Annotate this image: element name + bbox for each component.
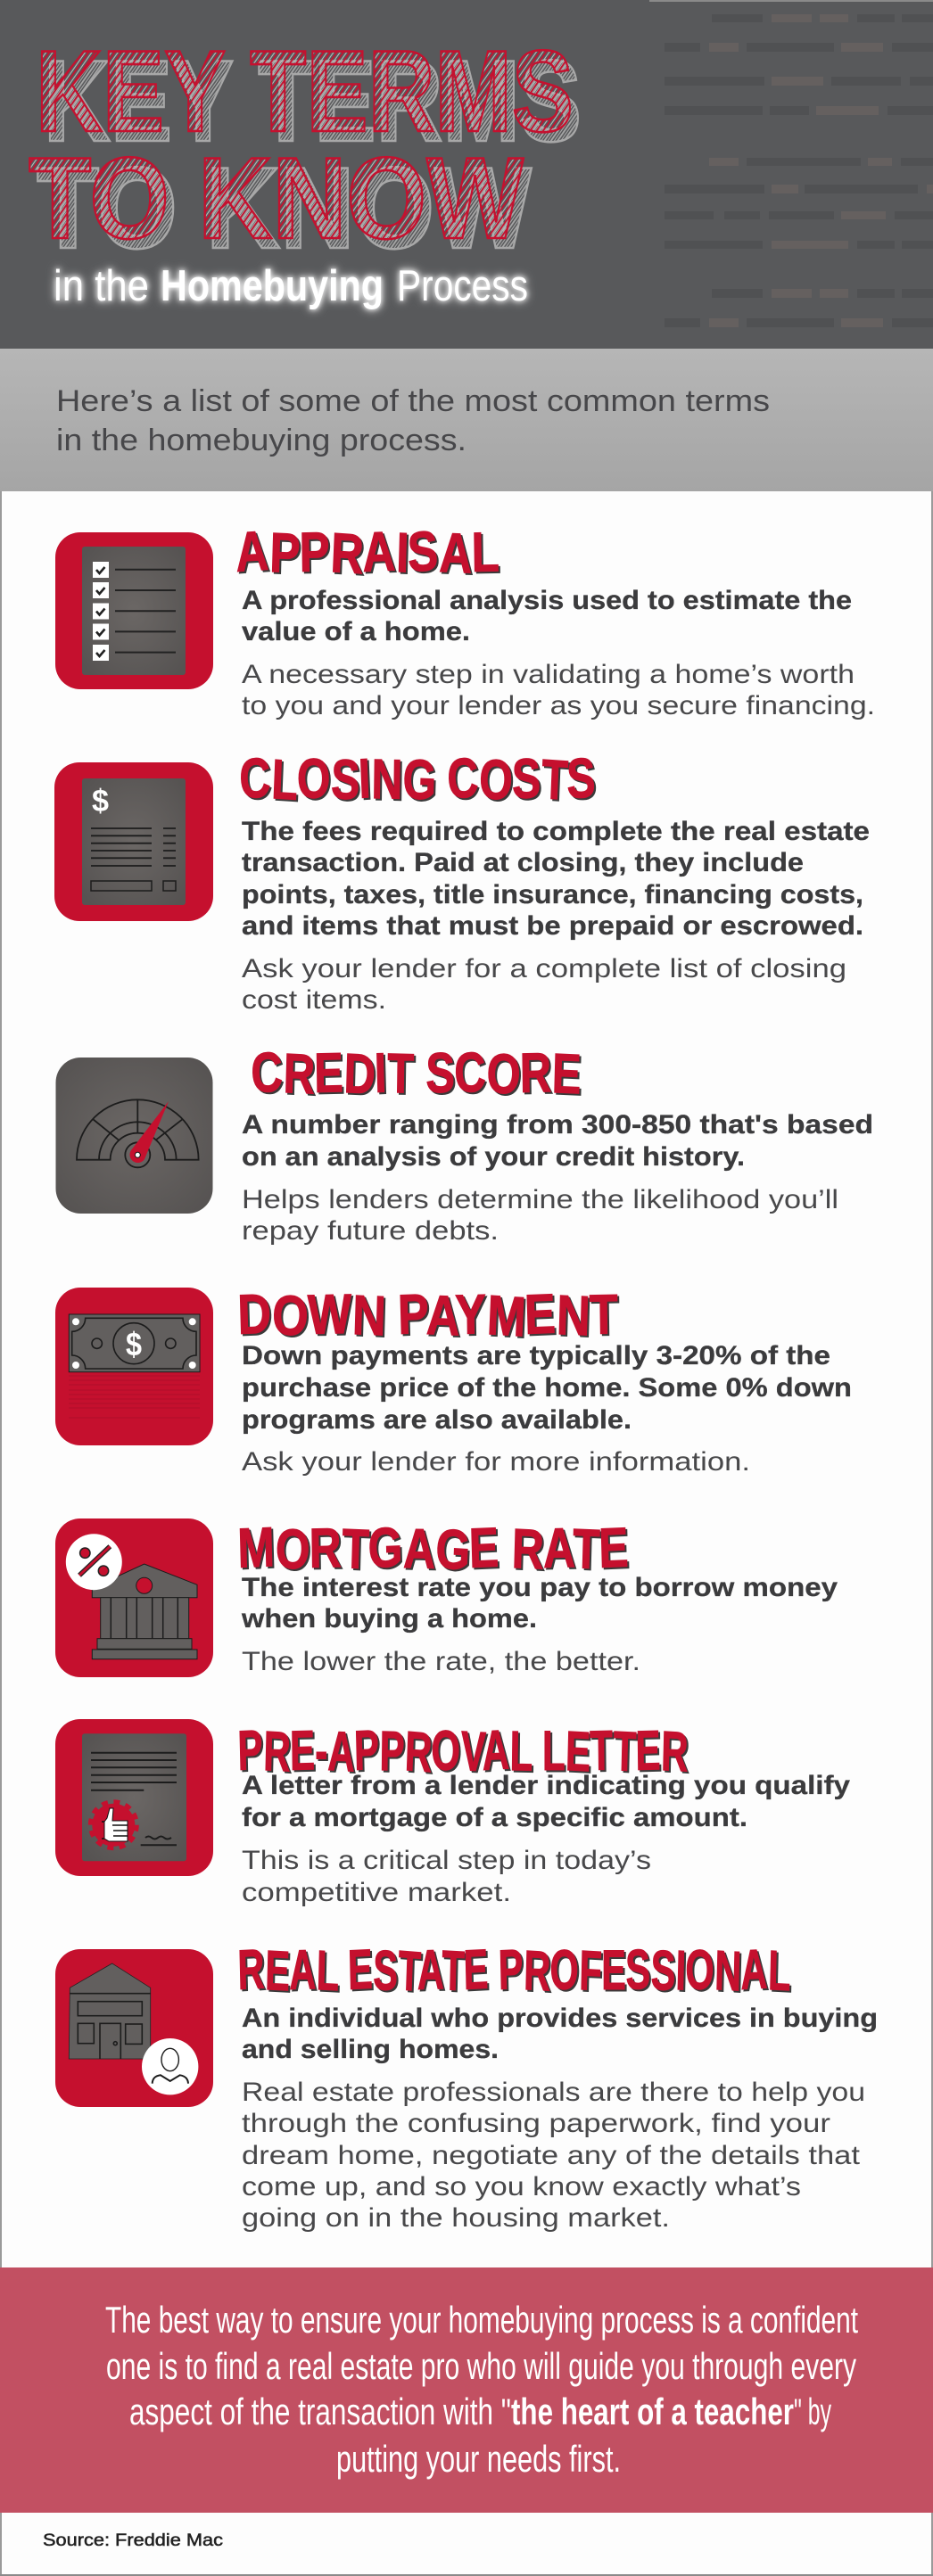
- heading: closing costs: CLOSING COSTS: [238, 747, 596, 812]
- panel: intro band: in the homebuying process.: [56, 424, 466, 457]
- panel: intro band: [0, 349, 933, 491]
- subtitle: Process: [397, 262, 528, 310]
- note: closing costs: cost items.: [242, 985, 386, 1015]
- panel: closing message: aspect of the transaction with ": [129, 2391, 511, 2432]
- note: closing costs: [242, 954, 846, 1015]
- title: [29, 26, 574, 263]
- note: pre-approval letter: [242, 1846, 651, 1907]
- heading: pre-approval letter: PRE-APPROVAL LETTER: [236, 1719, 689, 1784]
- definition: appraisal: value of a home.: [242, 617, 470, 646]
- definition: mortgage rate: when buying a home.: [241, 1604, 537, 1634]
- panel: mortgage rate: [55, 1517, 838, 1677]
- icon: stack of cash: [55, 1288, 213, 1445]
- icon: letter with seal: [55, 1719, 213, 1876]
- title: KEY TERMS: [36, 26, 574, 156]
- definition: credit score: A number ranging from 300-850 that's based: [242, 1110, 873, 1140]
- note: appraisal: [242, 660, 875, 720]
- note: credit score: repay future debts.: [242, 1216, 499, 1246]
- panel: closing message: the heart of a teacher: [511, 2391, 794, 2432]
- definition: real estate professional: An individual who provides services in buying: [242, 2004, 878, 2033]
- heading: down payment: DOWN PAYMENT: [236, 1283, 618, 1348]
- subtitle: Homebuying: [161, 262, 384, 310]
- icon: checklist: [55, 532, 213, 689]
- panel: closing message: putting your needs first.: [336, 2438, 621, 2480]
- note: credit score: Helps lenders determine the likelihood you’ll: [242, 1185, 838, 1214]
- title: TO KNOW: [29, 133, 524, 263]
- definition: closing costs: transaction. Paid at closing, they include: [242, 848, 804, 877]
- heading: real estate professional: REAL ESTATE PROFESSIONAL: [236, 1938, 792, 2003]
- subtitle: [54, 262, 528, 310]
- panel: down payment: [55, 1283, 852, 1477]
- subtitle: in the: [54, 262, 149, 310]
- definition: down payment: [242, 1341, 852, 1435]
- definition: down payment: purchase price of the home. Some 0% down: [242, 1373, 852, 1403]
- panel: closing message: [0, 2267, 933, 2513]
- definition: appraisal: A professional analysis used to estimate the: [242, 586, 852, 615]
- panel: pre-approval letter: [55, 1719, 850, 1907]
- definition: real estate professional: and selling homes.: [242, 2035, 499, 2064]
- icon: bank with percent: [55, 1518, 213, 1677]
- definition: down payment: programs are also available.: [242, 1405, 632, 1435]
- note: credit score: [242, 1185, 838, 1246]
- source note: Source: Freddie Mac: [43, 2531, 223, 2550]
- note: real estate professional: going on in the housing market.: [242, 2203, 670, 2233]
- icon: office and agent: [55, 1949, 213, 2107]
- definition: pre-approval letter: A letter from a lender indicating you qualify: [242, 1771, 850, 1800]
- icon: closing statement: $: [92, 784, 109, 819]
- definition: closing costs: points, taxes, title insurance, financing costs,: [242, 880, 863, 909]
- definition: real estate professional: [242, 2004, 878, 2064]
- note: real estate professional: through the confusing paperwork, find your: [242, 2109, 830, 2138]
- note: closing costs: Ask your lender for a complete list of closing: [242, 954, 846, 983]
- panel: closing message: " by: [794, 2391, 831, 2432]
- heading: credit score: CREDIT SCORE: [250, 1041, 582, 1106]
- definition: mortgage rate: [241, 1573, 838, 1634]
- icon: stack of cash: $: [126, 1326, 142, 1362]
- panel: header banner: [0, 0, 933, 349]
- definition: closing costs: The fees required to complete the real estate: [242, 817, 870, 846]
- note: pre-approval letter: competitive market.: [242, 1878, 511, 1907]
- heading: appraisal: APPRAISAL: [234, 520, 500, 586]
- definition: appraisal: [242, 586, 852, 646]
- panel: real estate professional: [55, 1938, 878, 2233]
- icon: gauge: [55, 1058, 212, 1214]
- panel: intro band: Here’s a list of some of the most common terms: [56, 384, 770, 418]
- definition: pre-approval letter: [242, 1771, 850, 1832]
- note: down payment: Ask your lender for more information.: [242, 1447, 750, 1477]
- definition: closing costs: and items that must be prepaid or escrowed.: [242, 911, 863, 941]
- panel: appraisal: [55, 520, 875, 720]
- definition: closing costs: [242, 817, 870, 941]
- note: real estate professional: come up, and so you know exactly what’s: [242, 2172, 801, 2202]
- note: appraisal: A necessary step in validating a home’s worth: [242, 660, 855, 689]
- note: real estate professional: [242, 2078, 865, 2233]
- note: real estate professional: dream home, negotiate any of the details that: [242, 2141, 860, 2170]
- note: real estate professional: Real estate professionals are there to help you: [242, 2078, 865, 2107]
- definition: mortgage rate: The interest rate you pay to borrow money: [242, 1573, 838, 1602]
- panel: closing costs: [54, 747, 870, 1015]
- panel: credit score: [55, 1041, 873, 1246]
- heading: mortgage rate: MORTGAGE RATE: [236, 1517, 629, 1582]
- definition: credit score: [242, 1110, 873, 1172]
- definition: credit score: on an analysis of your credit history.: [242, 1142, 745, 1172]
- definition: pre-approval letter: for a mortgage of a specific amount.: [242, 1803, 747, 1832]
- note: pre-approval letter: This is a critical step in today’s: [242, 1846, 651, 1875]
- note: mortgage rate: The lower the rate, the better.: [242, 1647, 640, 1676]
- definition: down payment: Down payments are typically 3-20% of the: [242, 1341, 830, 1370]
- icon: closing statement: [54, 762, 213, 921]
- note: appraisal: to you and your lender as you secure financing.: [242, 691, 875, 720]
